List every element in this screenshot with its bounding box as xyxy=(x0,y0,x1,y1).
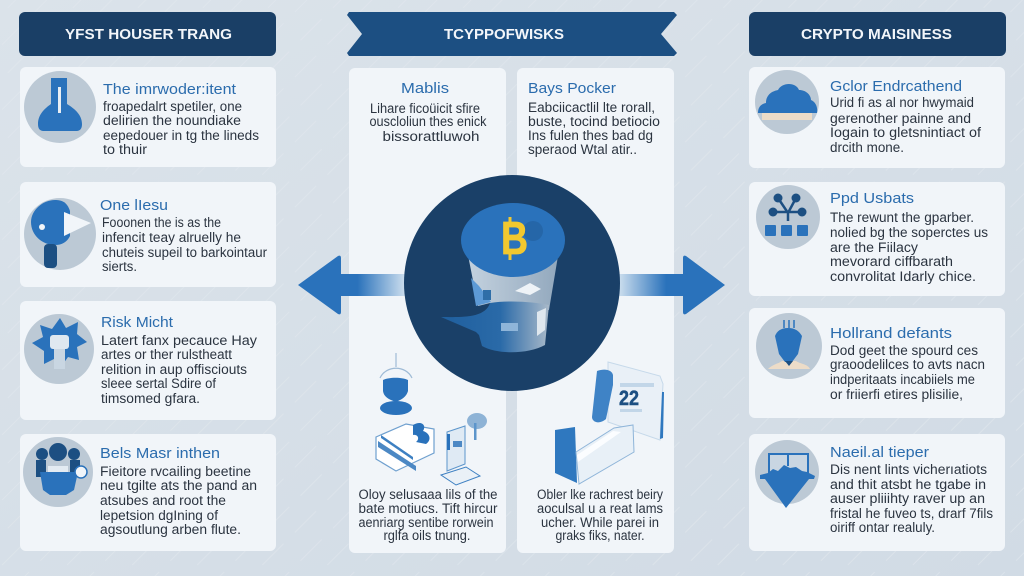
center panel left xyxy=(349,68,506,553)
text: right panel caption: Obler lke rachrest beiry xyxy=(537,487,663,502)
center panel right xyxy=(517,68,674,553)
cup body xyxy=(441,250,559,352)
right card 1 xyxy=(749,67,1005,168)
text: right card 2: Ppd Usbats xyxy=(830,191,914,207)
text: card 2: One lIesu xyxy=(100,198,168,214)
text: card 4: agsoutlung arben flute. xyxy=(100,522,241,537)
illustration: open document box xyxy=(555,362,664,484)
right card 4 xyxy=(749,434,1005,551)
icon: blue shield with chart xyxy=(755,440,819,508)
text: right card 2: mevorard ciffbarath xyxy=(830,254,953,269)
text: left panel caption: bate motiucs. Tift hircur xyxy=(358,501,498,516)
text: right card 3 xyxy=(830,326,985,402)
text: right card 1 xyxy=(830,79,981,155)
text: card 1: to thuir xyxy=(103,142,148,157)
text: Mablis xyxy=(370,81,487,144)
text: Bays Pocker: Eabciicactlil lte rorall, xyxy=(528,100,655,115)
right card 3 xyxy=(749,308,1005,418)
text: card 2: infencit teay alruelly he xyxy=(102,230,241,245)
left card 4 xyxy=(20,434,276,551)
text: right card 4: fristal he fuveo ts, drarf 7fils xyxy=(830,506,993,521)
left card 3 xyxy=(20,301,276,420)
text: card 3: timsomed gfara. xyxy=(101,391,200,406)
icon: blue cloud xyxy=(755,70,819,134)
cup lid xyxy=(461,203,565,277)
right column header: CRYPTO MAISINESS xyxy=(801,27,952,43)
text: right panel caption: ucher. While parei in xyxy=(541,515,659,530)
text: card 1: froapedalrt spetiler, one xyxy=(103,99,242,114)
icon: blue flask xyxy=(24,71,96,143)
text: right card 2: are the Fiilacy xyxy=(830,240,918,255)
left card 1 xyxy=(20,67,276,167)
text: card 2: sierts. xyxy=(102,259,137,274)
text: Mablis: bissorattluwoh xyxy=(382,129,480,144)
text: Bays Pocker: Bays Pocker xyxy=(528,81,616,97)
text: right panel caption xyxy=(537,487,663,543)
text: right card 1: Iogain to gletsnintiact of xyxy=(830,125,981,140)
text: Bays Pocker: speraod Wtal atir.. xyxy=(528,142,637,157)
text: card 3: Latert fanx pecauce Hay xyxy=(101,333,257,348)
text: right card 1: gerenother painne and xyxy=(830,111,971,126)
text: right card 4: Dis nent lints vicherıatiots xyxy=(830,462,987,477)
arrow: left xyxy=(298,256,406,314)
text: card 2: Fooonen the is as the xyxy=(102,215,221,230)
text: right card 4: auser pliiihty raver up an xyxy=(830,491,985,506)
icon: network nodes and boxes xyxy=(756,185,820,249)
text: card 4: atsubes and root the xyxy=(100,493,226,508)
text: card 4: Fieitore rvcailing beetine xyxy=(100,464,251,479)
text: right card 3: Dod geet the spourd ces xyxy=(830,343,978,358)
text: right card 1: drcith mone. xyxy=(830,140,904,155)
text: right card 1: Urid fi as al nor hwymaid xyxy=(830,95,974,110)
center circle with bitcoin cup xyxy=(404,175,620,391)
text: Bays Pocker: Ins fulen thes bad dg xyxy=(528,128,653,143)
illustration: shield and isometric desk xyxy=(376,353,487,485)
text: right card 2: The rewunt the gparber. xyxy=(830,210,974,225)
text: right panel caption: aoculsal u a reat lams xyxy=(537,501,663,516)
text: left panel caption xyxy=(358,487,498,543)
text: right card 3: Hollrand defants xyxy=(830,326,952,342)
text: card 1 xyxy=(103,82,259,157)
text: card 3: relition in aup offisciouts xyxy=(101,362,247,377)
text: right card 3: or friierfi etires plisilie, xyxy=(830,387,963,402)
left column header: YFST HOUSER TRANG xyxy=(65,27,232,43)
text: left panel caption: rglfa oils tnung. xyxy=(384,528,470,543)
text: card 4: neu tgilte ats the pand an xyxy=(100,478,257,493)
bitcoin symbol: B xyxy=(501,212,528,264)
text: card 2: chuteis supeil to barkointaur xyxy=(102,245,267,260)
center banner header: TCYPPOFWISKS xyxy=(444,27,564,43)
text: right card 4: oiriff ontar realuly. xyxy=(830,520,935,535)
text: right card 2 xyxy=(830,191,988,284)
text: right card 4 xyxy=(830,445,993,535)
icon: blue team group xyxy=(23,437,93,507)
text: Mablis: Lihare ficoüicit sfire xyxy=(370,101,480,116)
icon: blue megaphone xyxy=(24,198,96,270)
left column header xyxy=(19,12,276,56)
text: right panel caption: graks fiks, nater. xyxy=(556,528,644,543)
text: left panel caption: Oloy selusaaa lils of the xyxy=(358,487,498,502)
illustration: open document box: 22 xyxy=(619,387,639,410)
left card 2 xyxy=(20,182,276,287)
text: left panel caption: aenriarg sentibe rorwein xyxy=(358,515,494,530)
icon: blue star badge xyxy=(24,314,94,384)
text: card 1: delirien the noundiake xyxy=(103,113,241,128)
text: card 4: Bels Masr inthen xyxy=(100,446,220,462)
text: right card 2: nolied bg the soperctes us xyxy=(830,225,988,240)
right card 2 xyxy=(749,182,1005,296)
text: card 2 xyxy=(100,198,267,274)
text: Mablis: Mablis xyxy=(401,81,449,97)
text: right card 4: and thit atsbt he tgabe in xyxy=(830,477,986,492)
text: card 3: Risk Micht xyxy=(101,315,173,331)
center banner header xyxy=(347,12,677,56)
text: right card 4: Naeil.al tieper xyxy=(830,445,929,461)
right column header xyxy=(749,12,1006,56)
text: right card 1: Gclor Endrcathend xyxy=(830,79,962,95)
text: card 1: eepedouer in tg the lineds xyxy=(103,128,259,143)
text: Mablis: ouscloliun thes enick xyxy=(370,114,487,129)
text: card 3: artes or ther rulstheatt xyxy=(101,347,232,362)
text: Bays Pocker: buste, tocind betiocio xyxy=(528,114,660,129)
text: card 3: sleee sertal Sdire of xyxy=(101,376,216,391)
text: card 4 xyxy=(100,446,257,537)
text: right card 2: convrolitat Idarly chice. xyxy=(830,269,976,284)
text: right card 3: graoodelilces to avts nacn xyxy=(830,357,985,372)
icon: blue rocket xyxy=(756,313,822,379)
text: right card 3: indperitaats incabiiels me xyxy=(830,372,975,387)
text: card 1: The imrwoder:itent xyxy=(103,82,236,98)
text: Bays Pocker xyxy=(528,81,660,157)
text: card 3 xyxy=(101,315,257,406)
text: card 4: lepetsion dgIning of xyxy=(100,508,218,523)
arrow: right xyxy=(618,256,725,314)
